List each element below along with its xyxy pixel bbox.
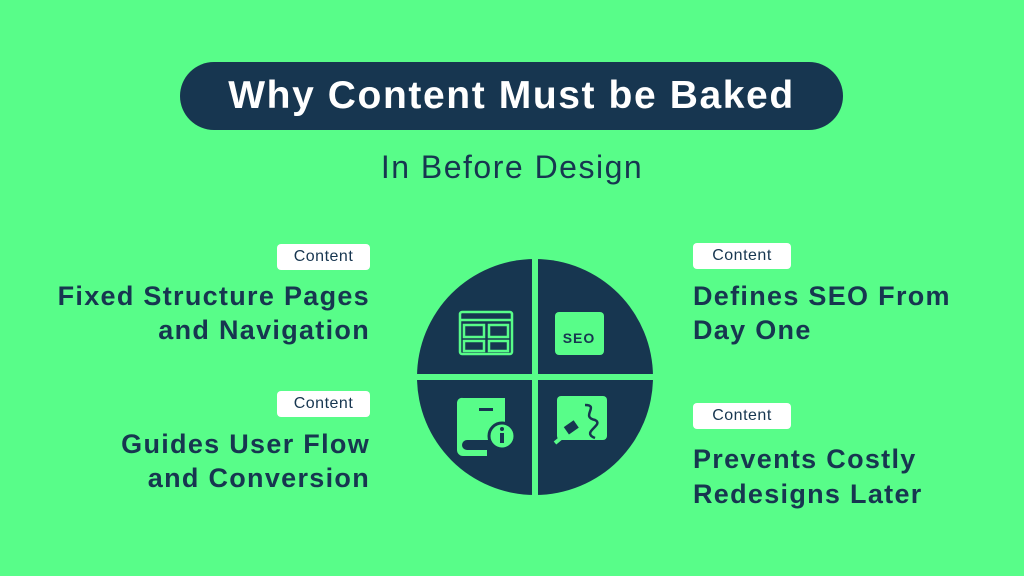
tag: right bottom: Content xyxy=(712,407,772,424)
tag: left bottom: Content xyxy=(294,395,353,412)
tag: left top xyxy=(277,244,370,270)
icon: book info xyxy=(457,398,515,456)
icon: window with brush xyxy=(555,396,607,443)
icon: SEO window xyxy=(555,312,604,355)
subtitle: In Before Design xyxy=(381,149,643,185)
icon: SEO window: SEO xyxy=(563,330,595,346)
heading: right bottom: Prevents Costly xyxy=(693,444,917,474)
tag: right top: Content xyxy=(712,247,772,264)
heading: right top: Defines SEO From xyxy=(693,281,951,311)
heading: left top: Fixed Structure Pages xyxy=(58,281,370,311)
tag: left top: Content xyxy=(294,248,353,265)
heading: right top: Day One xyxy=(693,315,812,345)
heading: left bottom: and Conversion xyxy=(148,463,370,493)
heading: right bottom: Redesigns Later xyxy=(693,479,923,509)
heading: left bottom xyxy=(121,429,370,493)
heading: left top: and Navigation xyxy=(158,315,370,345)
heading: right top xyxy=(693,281,951,345)
icon: layout xyxy=(460,312,512,354)
title pill: Why Content Must be Baked xyxy=(228,74,795,117)
tag: left bottom xyxy=(277,391,370,417)
tag: right top xyxy=(693,243,791,269)
tag: right bottom xyxy=(693,403,791,429)
heading: left top xyxy=(58,281,370,345)
heading: right bottom xyxy=(693,444,923,509)
heading: left bottom: Guides User Flow xyxy=(121,429,370,459)
title pill xyxy=(180,62,843,130)
